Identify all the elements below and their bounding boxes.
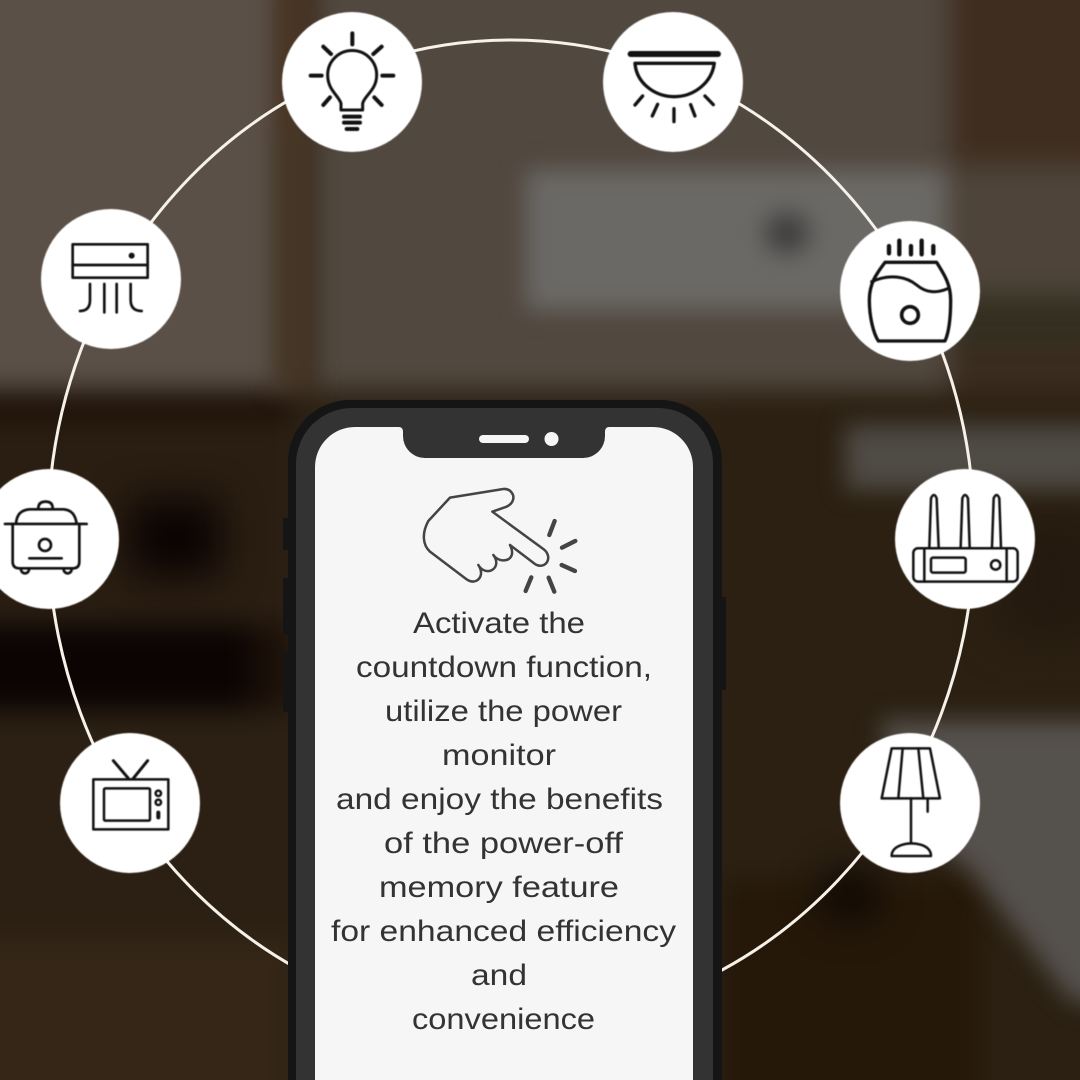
appliance: air conditioner (41, 209, 181, 349)
appliance: table lamp (840, 733, 980, 873)
description text: monitor (442, 739, 556, 772)
phone screen (315, 427, 693, 1080)
description text: utilize the power (385, 695, 622, 728)
description text: and (471, 959, 527, 992)
phone body (288, 400, 722, 1080)
appliance: ceiling lamp (603, 12, 743, 152)
smartphone (283, 400, 726, 1080)
appliance: humidifier (840, 221, 980, 361)
description text: for enhanced efficiency (331, 915, 676, 948)
appliance: television (60, 733, 200, 873)
side buttons (283, 518, 726, 712)
icon: pointing hand tapping (424, 489, 575, 592)
description text: Activate the (413, 607, 585, 640)
description text: countdown function, (356, 651, 652, 684)
phone bezel (296, 408, 713, 1080)
appliance: rice cooker (0, 469, 119, 609)
description text: memory feature (379, 871, 619, 904)
appliance: light bulb (282, 12, 422, 152)
appliance: router (895, 469, 1035, 609)
ring connecting the appliances (48, 40, 974, 1024)
speaker and camera (479, 432, 558, 446)
description text: convenience (412, 1003, 595, 1036)
description text: and enjoy the benefits (336, 783, 663, 816)
description text (331, 607, 676, 1036)
description text: of the power-off (384, 827, 624, 860)
